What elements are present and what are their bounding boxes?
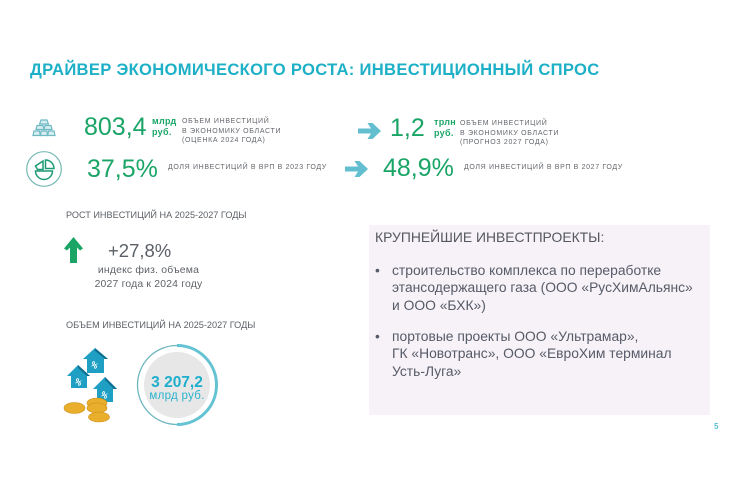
- project bullet 1: строительство комплекса по переработке: [392, 262, 661, 278]
- project bullet 2: Усть-Луга»: [392, 363, 461, 379]
- project bullet 1: •: [375, 262, 380, 278]
- icon: pie chart: [26, 151, 62, 187]
- icon: gold bars: [32, 119, 56, 136]
- heading: growth 2025-2027: РОСТ ИНВЕСТИЦИЙ НА 2025-2027 ГОДЫ: [66, 210, 246, 220]
- value: 803,4: 803,4: [84, 113, 147, 141]
- label: investment forecast 2027: (ПРОГНОЗ 2027 ГОДА): [460, 139, 549, 146]
- page number: 5: [714, 422, 718, 431]
- project bullet 1: и ООО «БХК»): [392, 297, 486, 313]
- label: physical volume index: индекс физ. объема: [98, 265, 199, 276]
- label: investment forecast 2027: ОБЪЕМ ИНВЕСТИЦИЙ: [460, 120, 547, 127]
- unit: трлн руб.: руб.: [434, 128, 454, 138]
- label: investment estimate 2024: ОБЪЕМ ИНВЕСТИЦИЙ: [182, 118, 269, 125]
- donut: total volume: [136, 344, 218, 426]
- label: investment estimate 2024: В ЭКОНОМИКУ ОБЛАСТИ: [182, 128, 281, 135]
- title: ДРАЙВЕР ЭКОНОМИЧЕСКОГО РОСТА: ИНВЕСТИЦИОННЫЙ СПРОС: [30, 60, 600, 79]
- project bullet 1: этансодержащего газа (ООО «РусХимАльянс»: [392, 279, 693, 295]
- project bullet 2: портовые проекты ООО «Ультрамар»,: [392, 328, 638, 344]
- value: 1,2: 1,2: [390, 114, 425, 142]
- project bullet 2: [375, 328, 672, 379]
- heading: volume 2025-2027: ОБЪЕМ ИНВЕСТИЦИЙ НА 2025-2027 ГОДЫ: [66, 320, 255, 330]
- value: 37,5%: 37,5%: [87, 155, 158, 183]
- icon: houses with percent and coins: [64, 348, 117, 422]
- icon: houses with percent and coins: %: [89, 359, 100, 371]
- label: investment forecast 2027: В ЭКОНОМИКУ ОБЛАСТИ: [460, 130, 559, 137]
- label: investment estimate 2024: (ОЦЕНКА 2024 ГОДА): [182, 137, 266, 144]
- label: share 2023: ДОЛЯ ИНВЕСТИЦИЙ В ВРП В 2023 ГОДУ: [168, 164, 327, 171]
- value: 48,9%: 48,9%: [383, 154, 454, 182]
- icon: houses with percent and coins: %: [99, 389, 110, 401]
- unit: млрд руб.: млрд: [152, 116, 177, 126]
- label: share 2027: ДОЛЯ ИНВЕСТИЦИЙ В ВРП В 2027 ГОДУ: [464, 164, 623, 171]
- value: 3 207,2: 3 207,2: [151, 374, 203, 391]
- icon: houses with percent and coins: %: [73, 376, 84, 388]
- unit: трлн руб.: трлн: [434, 117, 456, 127]
- unit: млрд руб.: [152, 116, 177, 137]
- label: investment estimate 2024: [182, 116, 281, 144]
- arrow: to 1,2: [358, 123, 381, 139]
- unit: трлн руб.: [434, 117, 456, 138]
- label: physical volume index: 2027 года к 2024 году: [95, 279, 202, 290]
- arrow: to 48,9%: [345, 161, 368, 177]
- label: investment forecast 2027: [460, 118, 559, 146]
- label: physical volume index: [95, 265, 202, 290]
- project bullet 2: •: [375, 328, 380, 344]
- unit: млрд руб.: руб.: [152, 126, 172, 136]
- project bullet 1: [375, 262, 693, 313]
- icon: green up arrow: [64, 237, 83, 263]
- unit: млрд руб.: млрд руб.: [149, 390, 205, 402]
- project bullet 2: ГК «Новотранс», ООО «ЕвроХим терминал: [392, 345, 672, 361]
- panel heading: КРУПНЕЙШИЕ ИНВЕСТПРОЕКТЫ:: [375, 229, 604, 245]
- panel: largest projects: [369, 225, 710, 415]
- value: +27,8%: +27,8%: [108, 240, 171, 261]
